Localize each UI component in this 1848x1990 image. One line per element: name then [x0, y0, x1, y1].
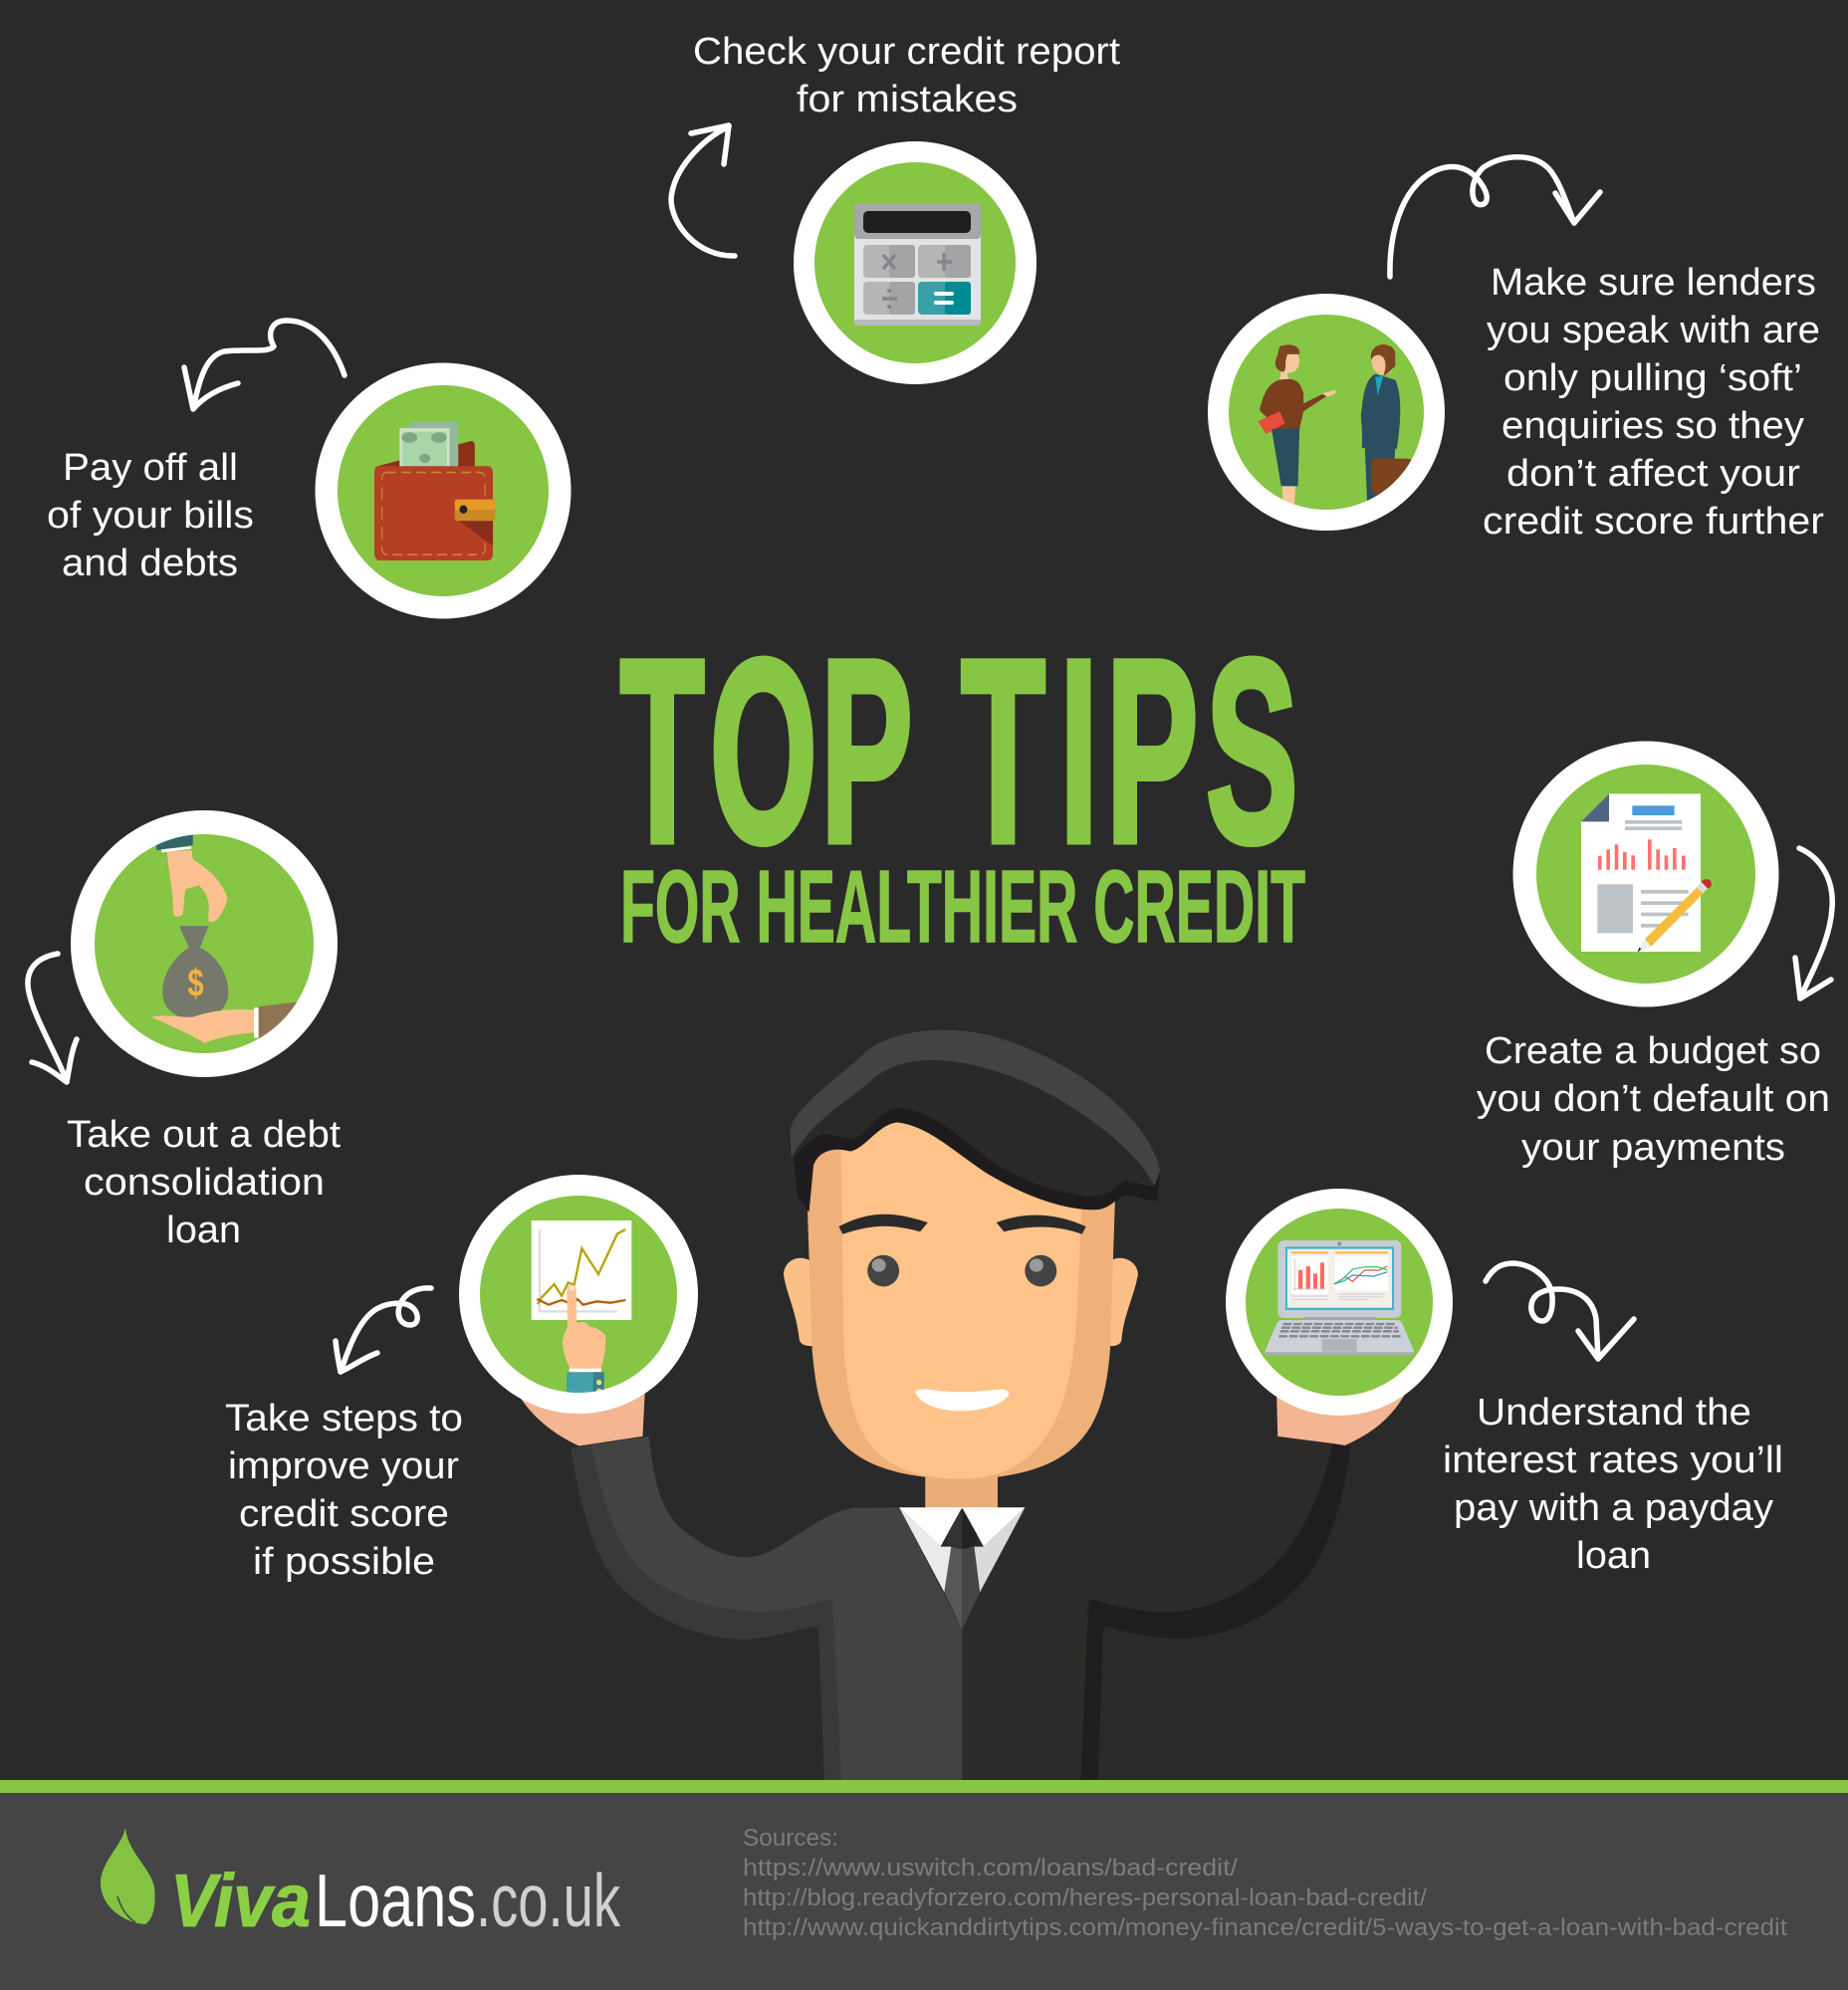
face	[808, 1110, 1115, 1479]
logo wordmark: .co.uk	[476, 1859, 620, 1942]
right hand	[1276, 1387, 1409, 1446]
necktie	[944, 1508, 980, 1630]
text: soft enquiries: credit score further	[1483, 501, 1824, 543]
icon circle: two business people	[1208, 294, 1445, 531]
jacket: right arm shade	[1081, 1443, 1351, 1780]
arrow: up-right curve	[671, 125, 735, 256]
left hand	[514, 1387, 645, 1446]
text: soft enquiries	[1483, 262, 1824, 543]
text: debt consolidation: Take out a debt	[67, 1114, 341, 1156]
icon: leaf	[101, 1828, 155, 1924]
arrow: curved down	[1795, 848, 1832, 998]
text: pay off: Pay off all	[63, 447, 238, 489]
text: debt consolidation	[67, 1114, 341, 1251]
tip: soft enquiries	[1208, 157, 1824, 543]
hair	[790, 1030, 1160, 1213]
text: soft enquiries: don’t affect your	[1506, 453, 1800, 495]
text: check report	[693, 31, 1120, 120]
text: improve score: credit score	[239, 1493, 449, 1535]
text: debt consolidation: loan	[166, 1210, 241, 1251]
icon circle: rising chart with pointing hand	[459, 1175, 698, 1414]
sources list	[743, 1825, 1787, 1941]
text: improve score: Take steps to	[225, 1398, 463, 1439]
ears	[784, 1258, 1138, 1346]
jacket: left arm shade	[571, 1445, 841, 1780]
text: check report: Check your credit report	[693, 31, 1120, 73]
icon circle: laptop with charts	[1226, 1189, 1453, 1416]
logo: viva loans	[101, 1828, 620, 1942]
sources list: https://www.uswitch.com/loans/bad-credit/	[743, 1855, 1238, 1881]
sources list: http://blog.readyforzero.com/heres-personal-loan-bad-credit/	[743, 1884, 1427, 1911]
text: improve score	[225, 1398, 463, 1583]
footer panel	[0, 1793, 1848, 1990]
text: pay off: of your bills	[47, 495, 254, 537]
text: budget: your payments	[1521, 1127, 1785, 1169]
text: check report: for mistakes	[797, 79, 1018, 120]
text: soft enquiries: you speak with are	[1487, 310, 1820, 351]
arrow: looped down-left	[336, 1288, 431, 1372]
tip: check your credit report	[671, 31, 1120, 384]
arrow: curved down	[28, 954, 77, 1082]
logo wordmark: Viva	[170, 1859, 311, 1942]
tip: debt consolidation	[28, 810, 341, 1251]
jacket: right side	[962, 1437, 1333, 1780]
neck	[925, 1475, 998, 1509]
icon circle: hand and money bag: $	[187, 963, 204, 1005]
mouth	[915, 1389, 1009, 1411]
text: interest rates: pay with a payday	[1454, 1487, 1773, 1529]
text: budget	[1477, 1030, 1830, 1169]
arrow: curved left-down	[184, 321, 345, 409]
text: interest rates: interest rates you’ll	[1443, 1439, 1783, 1481]
logo wordmark: Loans	[315, 1859, 476, 1942]
text: budget: you don’t default on	[1477, 1078, 1830, 1120]
eyes	[867, 1255, 1056, 1286]
sources list: http://www.quickanddirtytips.com/money-finance/credit/5-ways-to-get-a-loan-with-bad-credit	[743, 1914, 1787, 1941]
text: interest rates: loan	[1576, 1535, 1651, 1577]
green divider bar	[0, 1780, 1848, 1793]
arrow: looped down	[1486, 1263, 1634, 1359]
tip: create a budget	[1477, 741, 1832, 1169]
jacket: left side	[591, 1437, 962, 1780]
icon circle: hand and money bag	[71, 810, 338, 1077]
tip: improve credit score	[225, 1175, 698, 1583]
logo wordmark	[170, 1859, 620, 1942]
text: interest rates: Understand the	[1477, 1392, 1751, 1434]
text: soft enquiries: enquiries so they	[1502, 405, 1804, 447]
text: improve score: improve your	[228, 1445, 459, 1487]
icon circle: wallet	[315, 362, 572, 619]
text: soft enquiries: only pulling ‘soft’	[1503, 357, 1802, 399]
text: budget: Create a budget so	[1485, 1030, 1821, 1072]
text: pay off	[47, 447, 254, 584]
tip: pay off bills	[47, 321, 572, 619]
heading: for healthier credit: FOR HEALTHIER CREDIT	[620, 849, 1305, 964]
sources list: Sources:	[743, 1825, 838, 1852]
text: improve score: if possible	[253, 1541, 435, 1583]
arrow: looped	[1390, 157, 1600, 277]
businessman character	[514, 1030, 1409, 1780]
tip: payday interest rates	[1226, 1189, 1783, 1577]
text: pay off: and debts	[62, 543, 238, 584]
text: soft enquiries: Make sure lenders	[1491, 262, 1816, 304]
shirt and collar	[899, 1507, 1025, 1592]
heading: top tips: TOP TIPS	[620, 606, 1298, 897]
eyebrows	[838, 1215, 1086, 1234]
icon circle: budget document	[1513, 741, 1778, 1007]
text: interest rates	[1443, 1392, 1783, 1577]
text: debt consolidation: consolidation	[84, 1162, 325, 1204]
icon circle: calculator	[794, 141, 1037, 384]
